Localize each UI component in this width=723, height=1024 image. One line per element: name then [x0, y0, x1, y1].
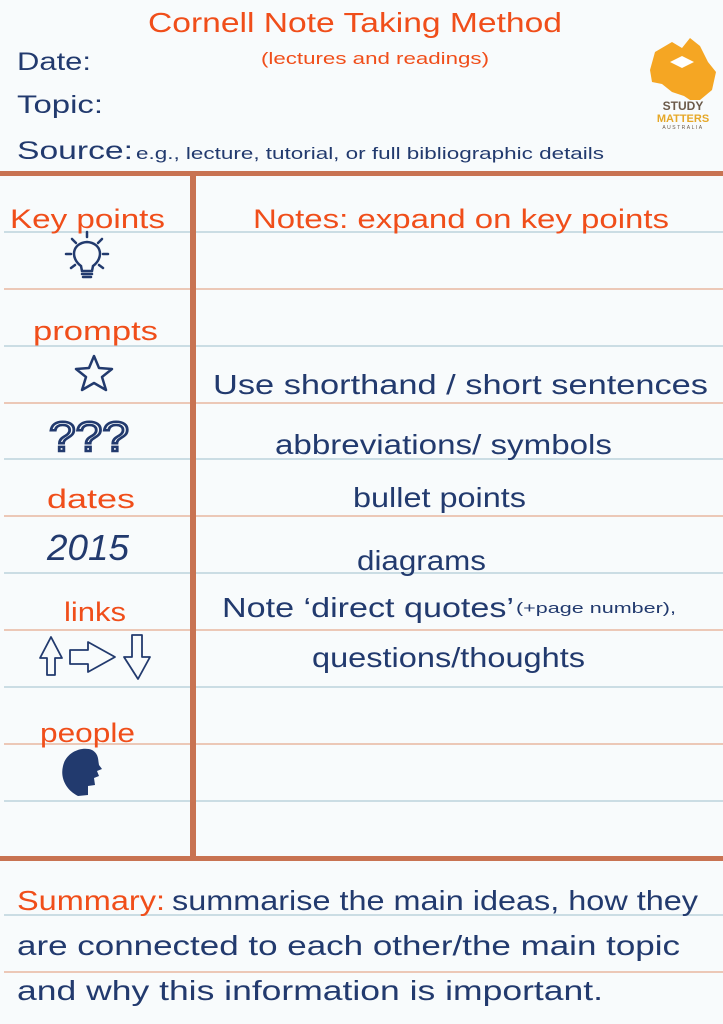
header fields: Date:: [17, 48, 91, 76]
notes text: questions/thoughts: [312, 642, 585, 673]
header fields: Source:: [17, 137, 133, 165]
notes text: [213, 369, 708, 673]
text: links: [64, 597, 126, 627]
summary: [17, 885, 698, 1006]
notes text: Use shorthand / short sentences: [213, 369, 708, 400]
logo: [650, 38, 716, 131]
summary: and why this information is important.: [17, 975, 603, 1006]
left labels: prompts: [33, 316, 158, 346]
icon: head: [62, 749, 102, 796]
notes text: bullet points: [353, 482, 526, 513]
logo: AUSTRALIA: [662, 125, 704, 131]
notes text: diagrams: [357, 545, 486, 576]
header fields: [17, 48, 604, 165]
summary: are connected to each other/the main topic: [17, 930, 680, 961]
column headings: Key points: [10, 204, 165, 234]
logo: MATTERS: [657, 113, 709, 125]
logo: STUDY: [663, 99, 703, 113]
icon: question marks: ???: [49, 413, 129, 460]
icon: lightbulb: [66, 232, 108, 277]
icon: arrows: [40, 635, 150, 679]
notes text: Note ‘direct quotes’: [222, 592, 514, 623]
2015: 2015: [46, 527, 130, 568]
header fields: e.g., lecture, tutorial, or full bibliographic details: [136, 144, 604, 163]
icon: star: [76, 356, 112, 390]
notes text: abbreviations/ symbols: [275, 429, 612, 460]
text: Notes: expand on key points: [253, 204, 669, 234]
text: people: [40, 718, 135, 748]
header fields: Topic:: [17, 91, 103, 119]
title: Cornell Note Taking Method: [148, 7, 562, 38]
notes text: (+page number),: [516, 600, 676, 617]
summary: summarise the main ideas, how they: [172, 885, 698, 916]
text: dates: [47, 484, 135, 514]
subtitle: (lectures and readings): [261, 49, 489, 68]
summary: Summary:: [17, 885, 165, 916]
